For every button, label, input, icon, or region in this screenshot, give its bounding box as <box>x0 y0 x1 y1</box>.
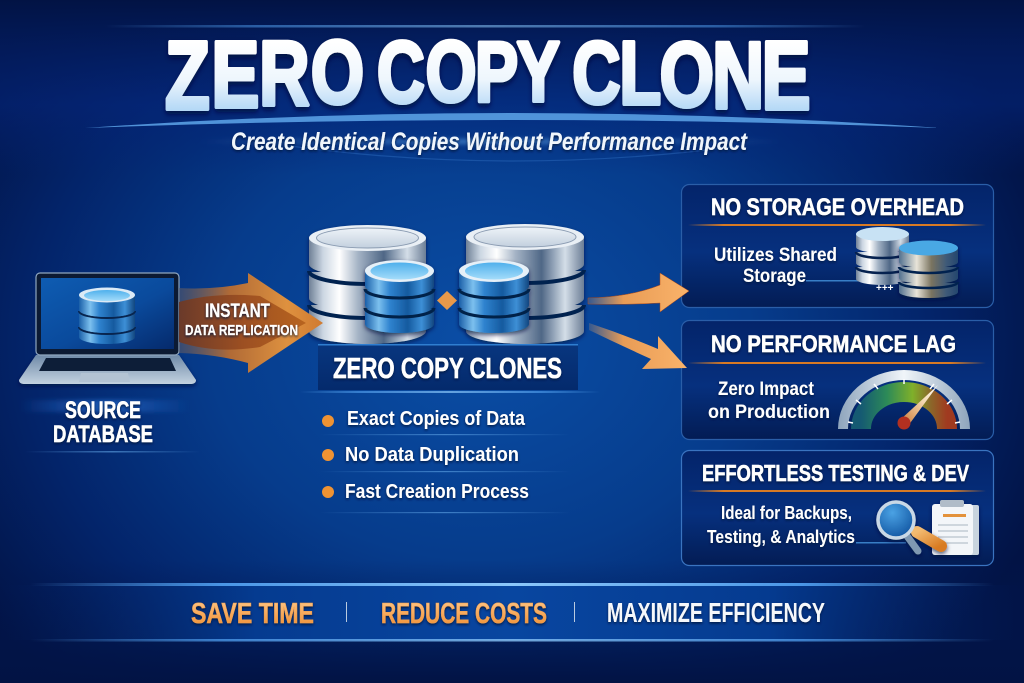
panel: no storage overhead: +++ <box>876 283 894 294</box>
bullet: fast creation: Fast Creation Process <box>345 481 529 503</box>
zero copy clones banner: ZERO COPY CLONES <box>333 353 562 385</box>
title: C <box>377 24 425 121</box>
laptop base <box>19 355 196 384</box>
laptop screen <box>41 278 174 349</box>
arrow: instant data replication: INSTANT <box>205 301 270 322</box>
laptop: source database <box>19 273 196 384</box>
panel: no storage overhead: Storage <box>743 266 806 287</box>
panel: no storage overhead: Utilizes Shared <box>714 245 837 266</box>
panel: no performance lag: on Production <box>708 402 830 423</box>
title: E <box>211 21 259 127</box>
arrow: instant data replication <box>179 273 323 373</box>
icon: silver storage stack <box>856 227 909 285</box>
bullet: no duplication: No Data Duplication <box>345 444 519 466</box>
icon: large left cylinder <box>309 225 426 344</box>
icon: performance gauge <box>838 370 970 430</box>
panel: effortless testing and dev: Ideal for Backups, <box>721 503 852 523</box>
icon: blue and bronze storage stack <box>899 240 958 298</box>
arrow: to no performance lag <box>589 323 687 369</box>
title <box>105 21 865 130</box>
panel: no storage overhead <box>682 184 994 308</box>
icon: clipboard <box>932 500 979 555</box>
clone benefits list <box>320 408 570 513</box>
title: Y <box>517 24 560 119</box>
title: R <box>259 23 310 125</box>
arrow: instant data replication: DATA REPLICATION <box>185 322 298 339</box>
source database label <box>20 397 200 452</box>
icon: small left blue cylinder <box>365 260 434 333</box>
title: P <box>475 24 518 119</box>
arrow: to no storage overhead <box>588 273 689 312</box>
title: Z <box>165 22 210 130</box>
footer strip <box>0 583 1024 642</box>
subtitle: Create Identical Copies Without Performance Impact <box>231 128 748 156</box>
icon: orange diamond <box>437 291 457 310</box>
panel: effortless testing and dev <box>682 450 994 566</box>
title: N <box>712 22 764 128</box>
bullet: exact copies: Exact Copies of Data <box>347 408 526 430</box>
laptop lid <box>36 273 179 355</box>
title: O <box>426 24 476 120</box>
title: C <box>572 23 621 122</box>
footer: save time: SAVE TIME <box>191 598 314 630</box>
source database label: DATABASE <box>53 421 153 448</box>
icon: magnifying glass <box>878 502 941 551</box>
icon: large right cylinder <box>466 224 584 344</box>
title: L <box>619 23 661 123</box>
panel: no storage overhead: NO STORAGE OVERHEAD <box>711 194 964 221</box>
panel: no performance lag: Zero Impact <box>718 379 815 400</box>
panel: effortless testing and dev: Testing, & Analytics <box>707 527 855 547</box>
title: O <box>660 24 714 126</box>
title: O <box>311 22 364 122</box>
keyboard <box>39 358 176 371</box>
icon: source database cylinder <box>79 288 135 344</box>
panel: no performance lag: NO PERFORMANCE LAG <box>711 331 956 358</box>
footer: maximize efficiency: MAXIMIZE EFFICIENCY <box>607 597 825 628</box>
footer: reduce costs: REDUCE COSTS <box>381 598 547 630</box>
source database label: SOURCE <box>65 397 141 424</box>
title arc divider <box>85 113 940 128</box>
zero copy clones databases <box>309 224 584 344</box>
icon: small right blue cylinder <box>459 260 529 333</box>
panel: no performance lag <box>682 320 994 440</box>
zero copy clones banner <box>300 344 600 393</box>
title: E <box>762 22 811 130</box>
trackpad <box>79 373 130 382</box>
